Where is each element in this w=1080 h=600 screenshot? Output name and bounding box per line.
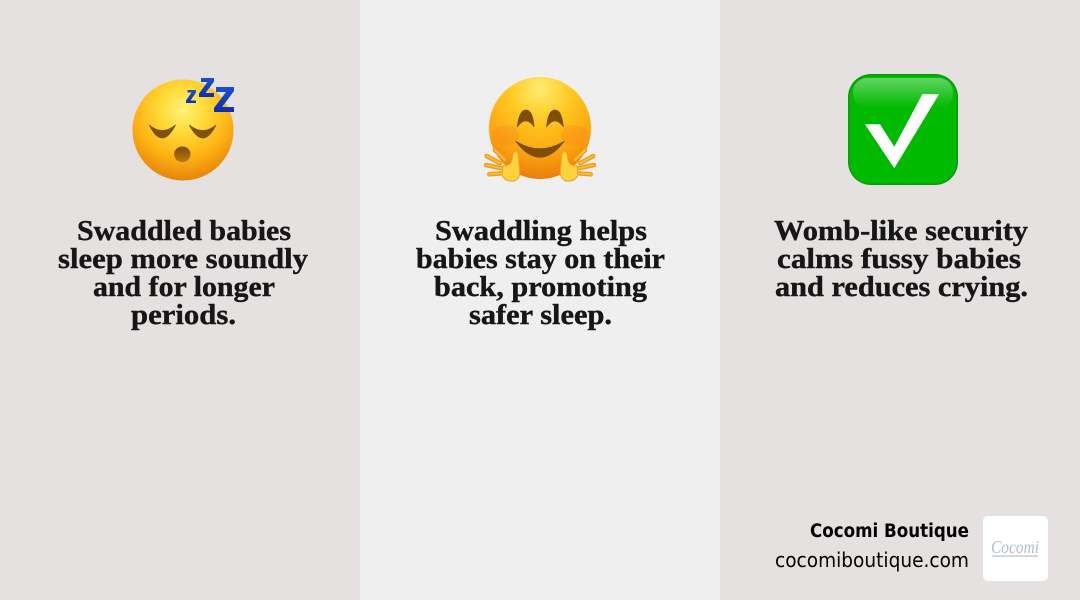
heading: safe sleep benefit: Swaddling helps bbox=[435, 215, 647, 247]
brand name: Cocomi Boutique bbox=[810, 521, 969, 542]
logo card: Cocomi bbox=[991, 537, 1039, 557]
heading: sleep benefit bbox=[58, 215, 309, 331]
heading: sleep benefit: Swaddled babies bbox=[77, 215, 291, 247]
brand website: cocomiboutique.com bbox=[775, 548, 969, 572]
heading: calming benefit: calms fussy babies bbox=[777, 243, 1021, 275]
heading: sleep benefit: sleep more soundly bbox=[58, 243, 309, 275]
heading: sleep benefit: and for longer bbox=[93, 271, 275, 303]
heading: safe sleep benefit: safer sleep. bbox=[469, 299, 612, 331]
logo card bbox=[983, 516, 1048, 581]
icon: hugging face bbox=[486, 77, 594, 181]
icon: check mark button bbox=[848, 74, 958, 185]
heading: sleep benefit: periods. bbox=[131, 299, 236, 331]
icon: sleeping face bbox=[132, 78, 234, 180]
heading: calming benefit: Womb-like security bbox=[774, 215, 1029, 247]
heading: safe sleep benefit: babies stay on their bbox=[416, 243, 665, 275]
panel: calming benefit bbox=[720, 0, 1080, 600]
heading: safe sleep benefit bbox=[416, 215, 665, 331]
heading: calming benefit: and reduces crying. bbox=[775, 271, 1028, 303]
heading: calming benefit bbox=[774, 215, 1029, 303]
heading: safe sleep benefit: back, promoting bbox=[434, 271, 648, 303]
footer: brand bbox=[775, 516, 1048, 581]
panel: safe sleep benefit bbox=[360, 0, 720, 600]
panel: sleep benefit bbox=[0, 0, 360, 600]
